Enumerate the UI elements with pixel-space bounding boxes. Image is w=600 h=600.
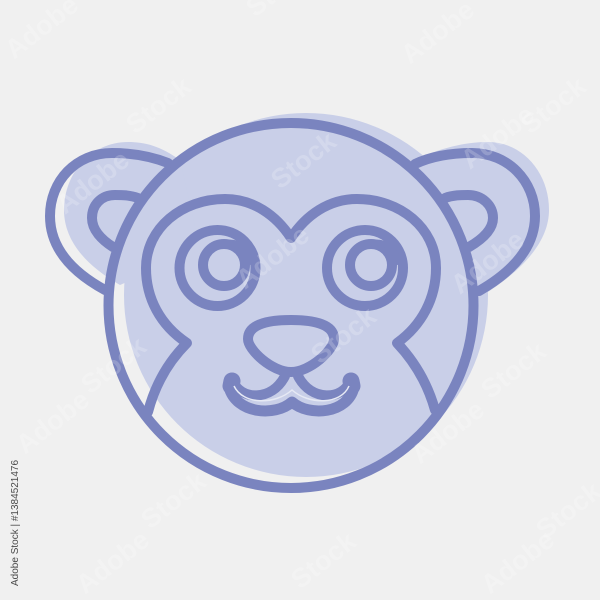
stock watermarks: Stock	[285, 525, 362, 595]
stock watermarks: Adobe	[230, 219, 315, 295]
left ear outline	[50, 153, 168, 290]
stock watermarks: Adobe	[455, 99, 540, 175]
left inner ear	[92, 195, 138, 247]
mouth highlight line	[234, 386, 349, 401]
right ear outline	[415, 153, 535, 291]
stock watermarks: Stock	[75, 330, 152, 400]
stock watermarks: Adobe	[10, 384, 95, 460]
right inner ear	[445, 195, 493, 247]
head outline	[108, 123, 474, 488]
stock watermarks: Adobe	[405, 394, 490, 470]
stock watermarks: Stock	[265, 125, 342, 195]
stock id caption: Adobe Stock | #1384521476	[10, 460, 21, 586]
face mask outline	[146, 199, 436, 412]
stock watermarks: Adobe	[445, 224, 530, 300]
stock watermarks: Stock	[120, 70, 197, 140]
flat colour fill shapes	[64, 113, 549, 477]
nose	[248, 320, 334, 372]
stock watermarks: Stock	[475, 335, 552, 405]
stock watermarks: Adobe	[70, 524, 155, 600]
right eye	[327, 230, 403, 306]
stock watermarks: Adobe	[475, 524, 560, 600]
stock watermarks: Stock	[305, 300, 382, 370]
stock watermarks: Stock	[515, 70, 592, 140]
left eye	[180, 230, 256, 306]
stock watermarks: Stock	[135, 465, 212, 535]
stock watermarks: Adobe	[50, 144, 135, 220]
outline strokes	[50, 123, 535, 488]
mouth	[229, 376, 354, 411]
